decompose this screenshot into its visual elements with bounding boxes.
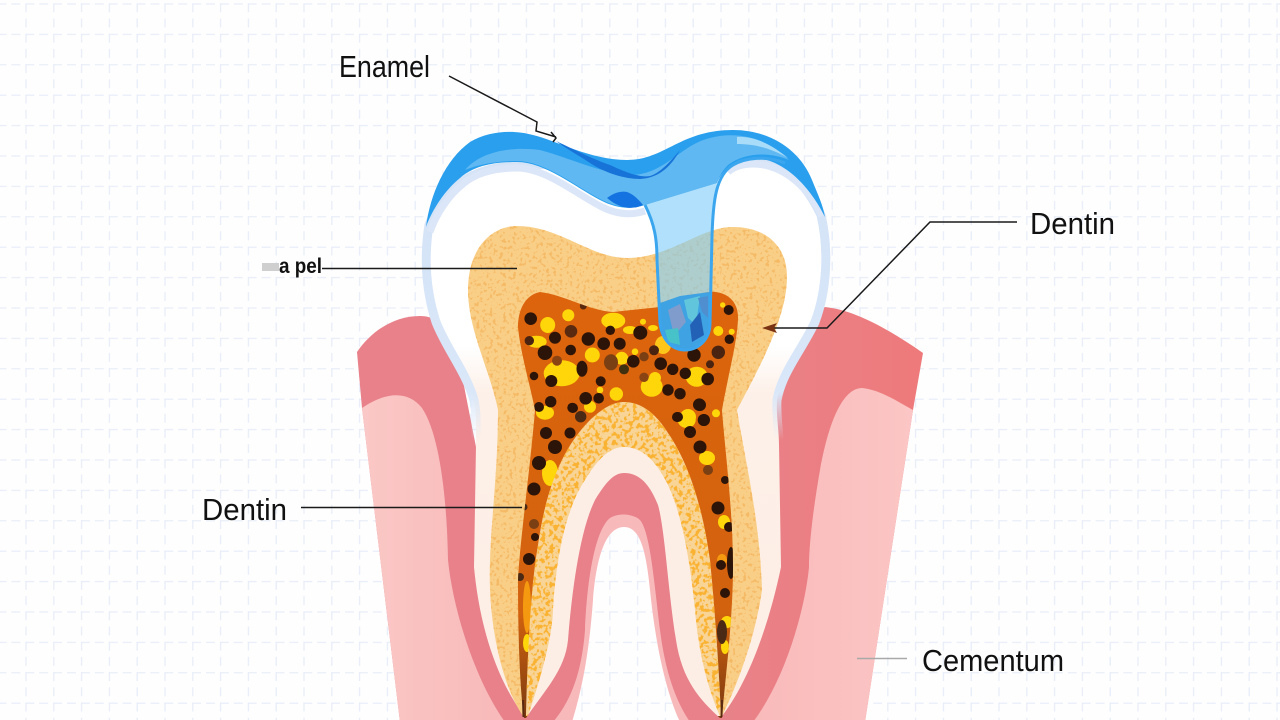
left bone <box>362 395 505 720</box>
pale band under enamel <box>430 164 822 232</box>
enamel highlight <box>737 137 788 158</box>
enamel light inner band <box>465 135 789 207</box>
label: garbled pulp label: a pel <box>279 255 322 278</box>
gum and bone tissue <box>357 307 923 720</box>
label: Dentin right: Dentin <box>1030 206 1115 241</box>
tooth body <box>426 160 826 716</box>
yellow pulp spots <box>523 302 735 654</box>
enamel dark spot <box>607 192 643 208</box>
right gum <box>715 307 923 720</box>
label: Cementum: Cementum <box>922 643 1064 678</box>
root tip lines <box>523 700 722 717</box>
enamel dark groove <box>556 141 680 179</box>
right bone <box>753 388 913 720</box>
dentin layer <box>468 226 787 716</box>
left gum <box>357 316 530 720</box>
tube glass shards <box>660 292 710 350</box>
label: Enamel <box>339 49 556 142</box>
label: Dentin left: Dentin <box>202 492 287 527</box>
inner arch cream layer <box>528 447 720 716</box>
enamel tube into pulp <box>645 158 785 350</box>
inner root arch dentin <box>526 402 721 716</box>
enamel base <box>426 130 825 227</box>
label: garbled pulp label <box>262 255 517 278</box>
enamel cap <box>426 130 825 227</box>
pulp chamber <box>516 292 738 718</box>
label: Dentin right <box>762 206 1115 333</box>
opening between roots <box>572 527 679 720</box>
dark pulp spots <box>516 302 735 644</box>
inner arch gum <box>505 473 753 720</box>
inner arch light pink <box>553 514 690 720</box>
label: Enamel: Enamel <box>339 49 430 84</box>
